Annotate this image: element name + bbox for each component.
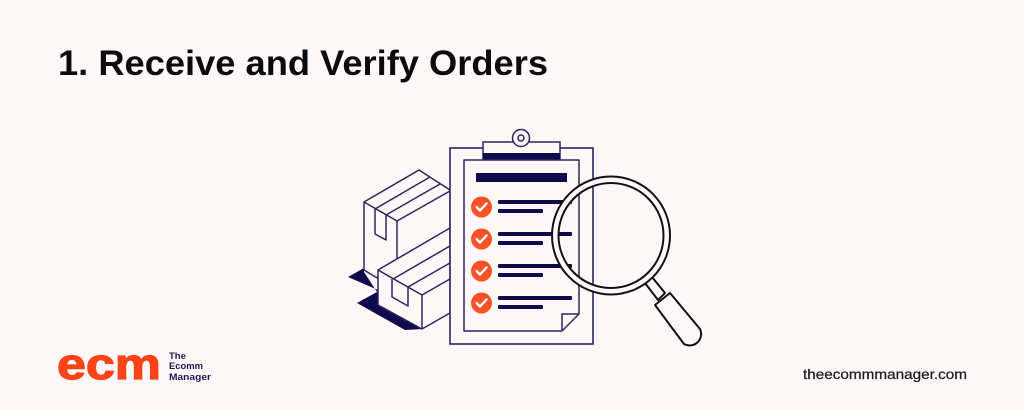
checklist item 3 [471,260,572,282]
logo tagline [169,351,211,383]
icon: box shadows [348,268,423,330]
heading bar on paper [476,173,567,182]
icon: magnifying glass [552,176,701,345]
magnifier ring [552,176,670,294]
icon: clipboard clip [483,130,560,160]
logo: ecm wordmark [57,340,211,389]
title: 1. Receive and Verify Orders [58,44,548,83]
illustration: boxes, clipboard and magnifier [348,130,701,345]
panel: clipboard board [450,148,593,344]
checklist item 2 [471,228,572,250]
magnifier handle [655,293,701,345]
checklist item 1 [471,196,572,218]
website url: theecommmanager.com [803,366,967,382]
magnifier neck [645,277,665,300]
icon: lower cardboard box [378,228,450,329]
logo tagline: Manager [169,372,211,383]
panel: paper sheet [464,160,579,331]
logo letters: ecm [57,340,161,389]
checklist item 4 [471,292,572,314]
logo tagline: Ecomm [169,361,203,372]
icon: upper cardboard box [364,170,450,290]
logo tagline: The [169,351,186,362]
